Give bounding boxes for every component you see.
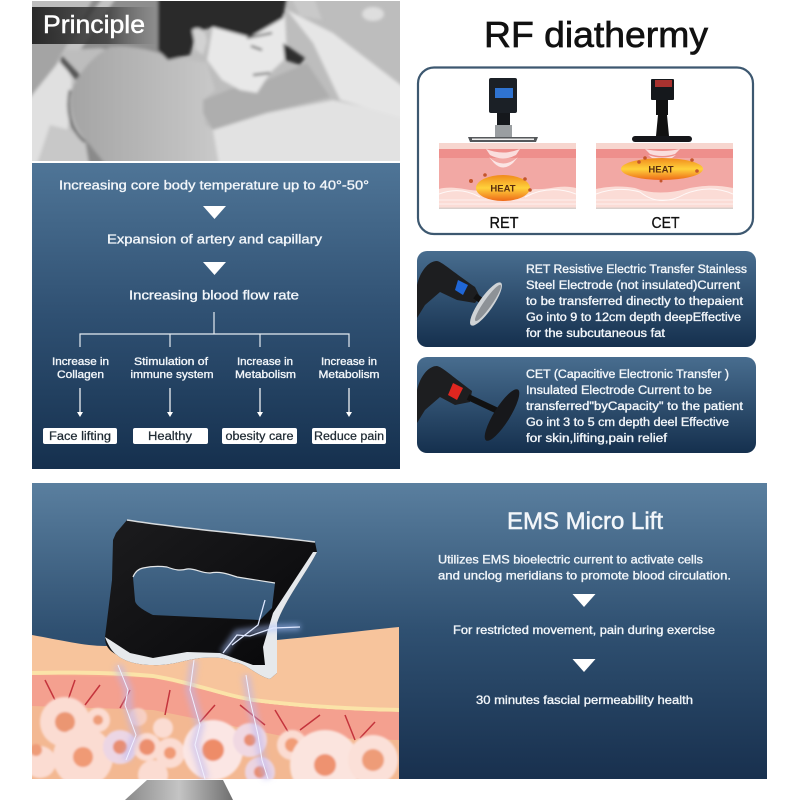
card: RET description — [417, 251, 756, 347]
text: CET details: Insulated Electrode Current to be — [526, 385, 712, 397]
column: immune system: Stimulation of — [134, 356, 209, 368]
column: metabolism 1: obesity care — [226, 431, 294, 443]
icon: CET probe — [632, 79, 692, 142]
text: restricted movement: For restricted movement, pain during exercise — [453, 623, 715, 637]
arrow: down triangle 1 — [203, 206, 226, 219]
diagram: CET heat zone: HEAT — [648, 164, 674, 176]
step: expansion: Expansion of artery and capillary — [107, 232, 323, 246]
panel: principle flow — [32, 163, 400, 469]
heading: EMS Micro Lift: EMS Micro Lift — [507, 508, 663, 535]
arrow: EMS triangle 2 — [572, 659, 596, 672]
icon: CET handle — [417, 366, 525, 445]
column: metabolism 2: Reduce pain — [314, 431, 384, 443]
text: RET details: to be transferred dinectly to thepaient — [526, 296, 744, 308]
step: blood flow: Increasing blood flow rate — [129, 288, 299, 302]
text: RET details: RET Resistive Electric Transfer Stainless — [526, 264, 747, 276]
column: collagen: Increase in — [52, 356, 109, 368]
diagram: CET skin — [596, 143, 733, 209]
column: metabolism 1: Increase in — [237, 356, 293, 368]
column: metabolism 2: Increase in — [321, 356, 377, 368]
column: metabolism 1 — [222, 356, 297, 444]
column: immune system: Healthy — [148, 431, 192, 443]
arrow: EMS triangle 1 — [572, 594, 596, 607]
column: metabolism 1: Metabolism — [235, 369, 296, 381]
diagram: CET heat zone — [621, 156, 703, 182]
label: CET: CET — [652, 215, 680, 232]
tree connector — [80, 312, 349, 347]
text: CET details — [526, 369, 744, 445]
title: RF diathermy: RF diathermy — [484, 14, 708, 55]
column: immune system: immune system — [130, 369, 214, 381]
text: RET details — [526, 264, 747, 340]
column: collagen: Face lifting — [49, 431, 111, 443]
text: CET details: transferred"byCapacity" to the patient — [526, 401, 744, 413]
illustration: electric sparks — [118, 660, 268, 779]
text: RET details: Go into 9 to 12cm depth deepEffective — [526, 312, 741, 324]
text: RET details: for the subcutaneous fat — [526, 328, 666, 340]
illustration: skin cross-section — [32, 627, 399, 779]
text: EMS intro — [438, 552, 731, 582]
column: immune system — [130, 356, 214, 444]
diagram: RET skin — [439, 143, 576, 209]
text: RET details: Steel Electrode (not insulated)Current — [526, 280, 741, 292]
icon: RET probe — [468, 78, 538, 142]
text: EMS intro: Utilizes EMS bioelectric current to activate cells — [438, 552, 703, 566]
tag: Principle — [32, 7, 157, 44]
column: metabolism 2 — [312, 356, 386, 444]
column: collagen — [43, 356, 117, 444]
icon: EMS device — [105, 520, 317, 679]
photo: woman relaxing — [32, 1, 400, 161]
icon: RET handle — [417, 261, 507, 329]
diagram: RET heat zone: HEAT — [490, 184, 516, 194]
text: CET details: CET (Capacitive Electronic Transfer ) — [526, 369, 729, 381]
panel: RET and CET diagram — [418, 68, 753, 234]
card: CET description — [417, 357, 756, 453]
icon: cropped device at bottom edge — [125, 780, 233, 800]
column: collagen: Collagen — [57, 369, 104, 381]
step: core temperature: Increasing core body temperature up to 40°-50° — [59, 178, 369, 192]
label: RET: RET — [490, 215, 519, 232]
text: CET details: Go int 3 to 5 cm depth deel Effective — [526, 417, 729, 429]
panel: EMS Micro Lift — [24, 483, 767, 800]
column: metabolism 2: Metabolism — [318, 369, 380, 381]
arrow: down triangle 2 — [203, 262, 226, 275]
tag: Principle: Principle — [43, 11, 145, 39]
text: EMS intro: and unclog meridians to promote blood circulation. — [438, 568, 731, 582]
text: CET details: for skin,lifting,pain relief — [526, 433, 668, 445]
text: 30 minutes: 30 minutes fascial permeability health — [476, 693, 693, 707]
diagram: RET heat zone — [469, 173, 532, 201]
